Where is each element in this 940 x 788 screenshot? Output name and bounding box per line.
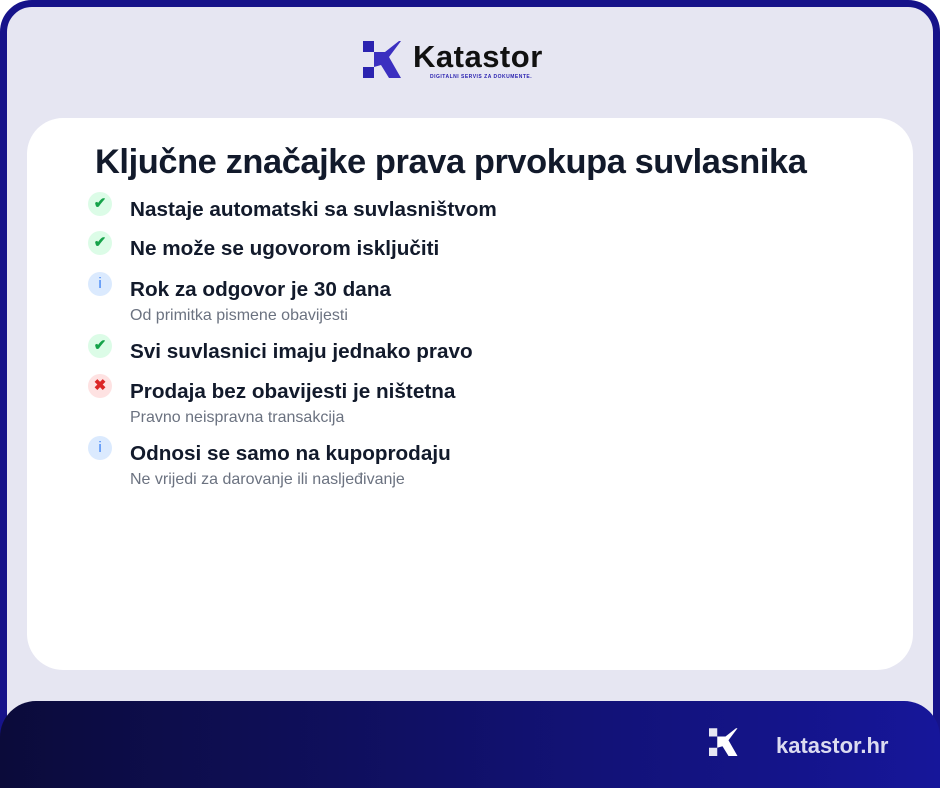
icon: K logo — [363, 41, 401, 78]
logo — [363, 39, 543, 80]
item 2 — [88, 231, 439, 260]
item 6 — [88, 436, 451, 488]
footer — [0, 701, 940, 788]
item 1: ✔ — [94, 195, 106, 212]
footer url: katastor.hr — [776, 733, 888, 758]
item 4: ✔ — [94, 337, 106, 354]
item 3: Rok za odgovor je 30 dana — [130, 278, 391, 301]
item 2: ✔ — [94, 234, 106, 251]
icon: footer K logo — [709, 728, 738, 756]
item 6: Odnosi se samo na kupoprodaju — [130, 442, 451, 465]
item 6: Ne vrijedi za darovanje ili nasljeđivanje — [130, 471, 405, 488]
item 1: Nastaje automatski sa suvlasništvom — [130, 198, 497, 221]
tagline: DIGITALNI SERVIS ZA DOKUMENTE. — [430, 74, 532, 80]
item 3: i — [98, 275, 102, 292]
item 3: Od primitka pismene obavijesti — [130, 307, 348, 324]
item 3 — [88, 272, 392, 324]
item 5 — [88, 374, 456, 426]
title: Ključne značajke prava prvokupa suvlasnika — [95, 143, 806, 181]
item 5: ✖ — [94, 377, 106, 394]
item 4: Svi suvlasnici imaju jednako pravo — [130, 340, 473, 363]
item 2: Ne može se ugovorom isključiti — [130, 237, 439, 260]
brand name: Katastor — [413, 39, 543, 74]
panel: features card — [27, 118, 913, 670]
item 5: Prodaja bez obavijesti je ništetna — [130, 380, 455, 403]
item 6: i — [98, 439, 102, 456]
item 5: Pravno neispravna transakcija — [130, 409, 344, 426]
